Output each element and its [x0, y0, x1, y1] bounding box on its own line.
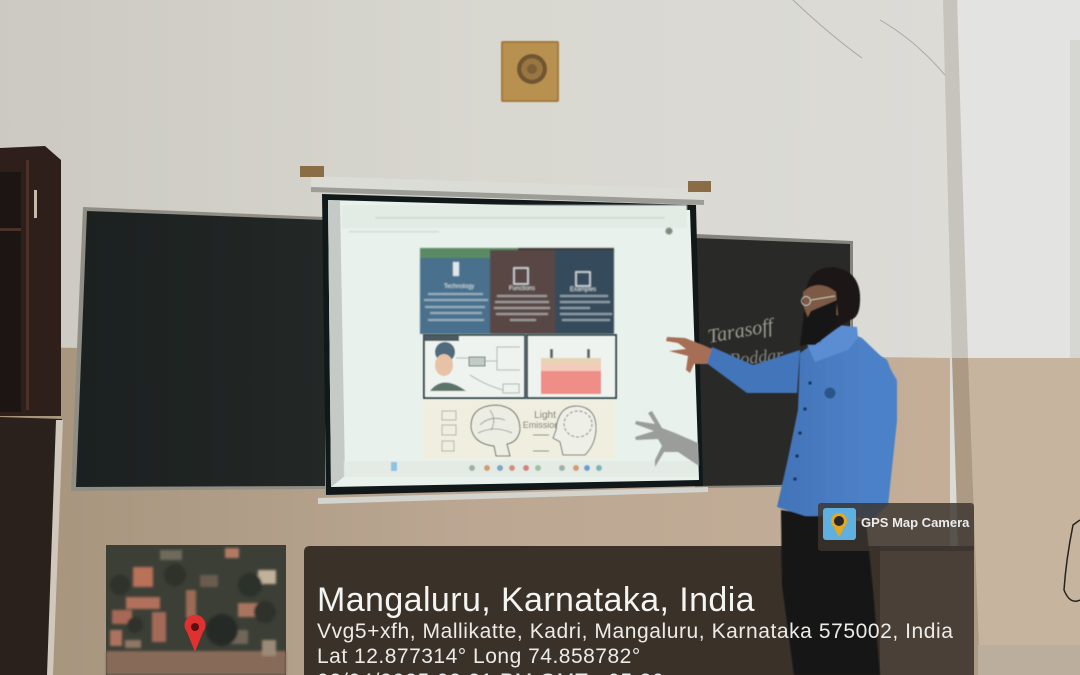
screen roller housing — [300, 166, 711, 205]
location title: Mangaluru, Karnataka, India — [317, 581, 755, 619]
browser toolbar — [342, 205, 687, 234]
icon: red map pin — [185, 615, 206, 652]
left cabinet — [0, 146, 61, 416]
head — [800, 267, 860, 345]
buttons and logo — [793, 356, 836, 481]
caption panel background — [304, 546, 880, 675]
slide: brain illustrations: Light — [534, 410, 556, 421]
right sleeve — [862, 345, 897, 512]
icon: camera pin — [823, 508, 856, 540]
slide: three dark columns — [420, 248, 614, 334]
wall cable at right edge — [1064, 520, 1080, 601]
beard — [800, 300, 837, 346]
taskbar — [344, 461, 697, 477]
presenter — [666, 267, 897, 675]
glasses — [802, 296, 835, 306]
blackboard right with chalk writing: Poddar — [727, 344, 785, 370]
hand shadow on screen — [635, 411, 699, 467]
screen frame — [322, 194, 703, 495]
column text — [424, 262, 612, 321]
extended arm — [705, 347, 800, 393]
pointing hand — [666, 337, 712, 373]
slide: head diagram panel — [424, 335, 525, 398]
trousers — [781, 510, 880, 675]
map thumbnail — [106, 545, 286, 675]
GPS Map Camera badge — [818, 503, 974, 551]
slide: brain illustrations — [423, 400, 615, 459]
face — [803, 285, 838, 318]
right caption panel background — [880, 546, 974, 675]
blackboard right with chalk writing: Tarasoff — [706, 314, 777, 348]
neck and collar — [805, 325, 858, 362]
blackboard left — [71, 207, 325, 491]
column text: Functions — [509, 286, 535, 292]
column text: Examples — [570, 287, 596, 293]
blackboard right with chalk writing — [695, 234, 853, 488]
slide: tissue diagram panel — [527, 335, 616, 398]
slide: brain illustrations: Emission — [523, 420, 559, 430]
column text: Technology — [444, 284, 474, 290]
wall speaker — [501, 41, 559, 102]
address line: Vvg5+xfh, Mallikatte, Kadri, Mangaluru, Karnataka 575002, India — [317, 620, 954, 643]
location caption text — [317, 581, 954, 675]
projector screen — [300, 166, 711, 504]
coordinates line: Lat 12.877314° Long 74.858782° — [317, 645, 641, 668]
shirt body — [777, 327, 897, 520]
screen surface — [328, 200, 699, 487]
GPS Map Camera badge: GPS Map Camera — [861, 515, 970, 530]
lectern at left — [0, 417, 63, 675]
